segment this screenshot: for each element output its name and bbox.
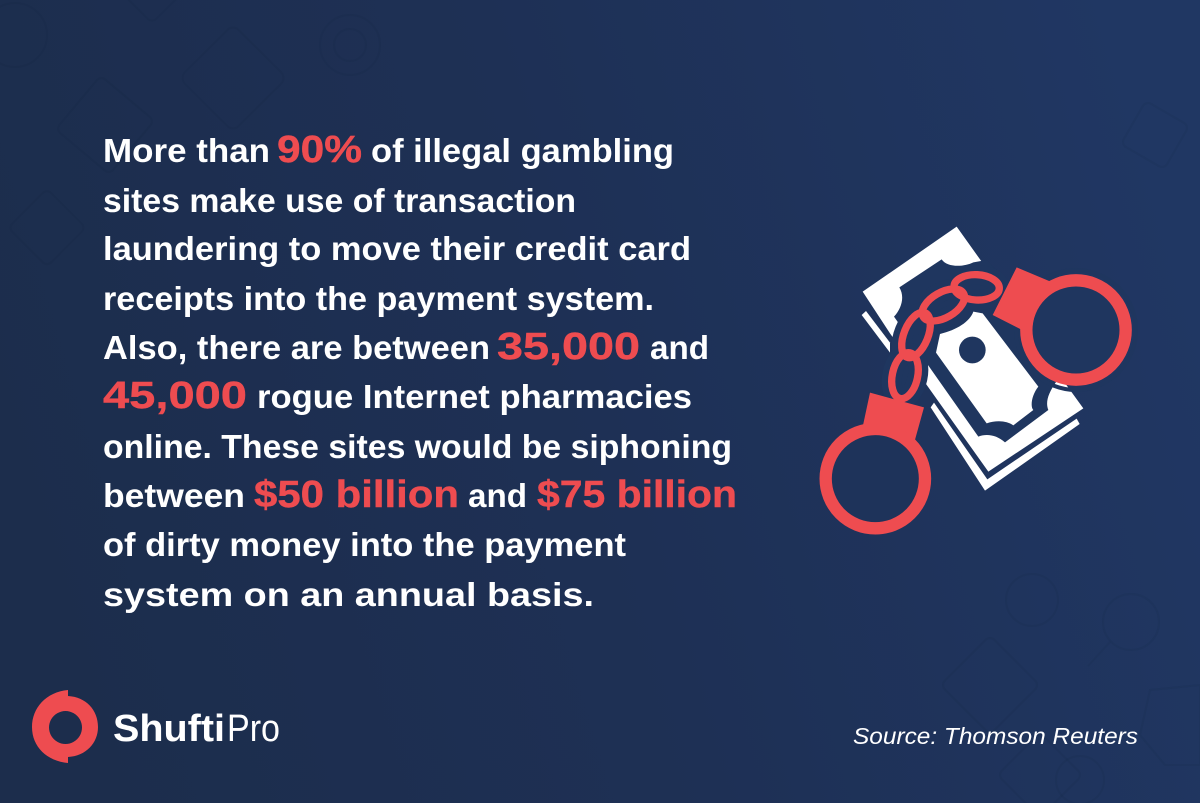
logo wordmark: Shufti: [113, 708, 225, 750]
logo: Shufti Pro: [32, 690, 280, 763]
main statistics paragraph: online. These sites would be siphoning: [103, 429, 732, 466]
highlighted figure: $50 billion: $50 billion: [254, 474, 459, 516]
highlighted figure: $75 billion: $75 billion: [537, 474, 737, 516]
highlighted figure: 35,000: 35,000: [497, 326, 640, 368]
main statistics paragraph: Also, there are between: [103, 330, 490, 367]
icon: logo ring: [32, 690, 98, 763]
main statistics paragraph: [103, 129, 737, 614]
highlighted figure: 90%: 90%: [277, 129, 362, 171]
logo: Shufti Pro: Pro: [227, 708, 280, 750]
icon: stack of banknotes: [862, 227, 1083, 491]
main statistics paragraph: between: [103, 478, 245, 515]
main statistics paragraph: receipts into the payment system.: [103, 281, 654, 318]
main statistics paragraph: system on an annual basis.: [103, 577, 594, 614]
icon: left cuff: [826, 393, 925, 528]
main statistics paragraph: sites make use of transaction: [103, 183, 576, 220]
main statistics paragraph: rogue Internet pharmacies: [257, 379, 692, 416]
main statistics paragraph: laundering to move their credit card: [103, 231, 691, 268]
icon: right cuff: [993, 267, 1136, 390]
main statistics paragraph: of dirty money into the payment: [103, 527, 626, 564]
main statistics paragraph: and: [468, 478, 527, 515]
icon: handcuff chain: [888, 273, 1000, 401]
icon: handcuffs over banknotes: [826, 227, 1136, 528]
main statistics paragraph: More than: [103, 133, 270, 170]
main statistics paragraph: of illegal gambling: [371, 133, 674, 170]
source credit: Source: Thomson Reuters: [853, 723, 1139, 749]
highlighted figure: 45,000: 45,000: [103, 375, 247, 417]
main statistics paragraph: and: [650, 330, 709, 367]
